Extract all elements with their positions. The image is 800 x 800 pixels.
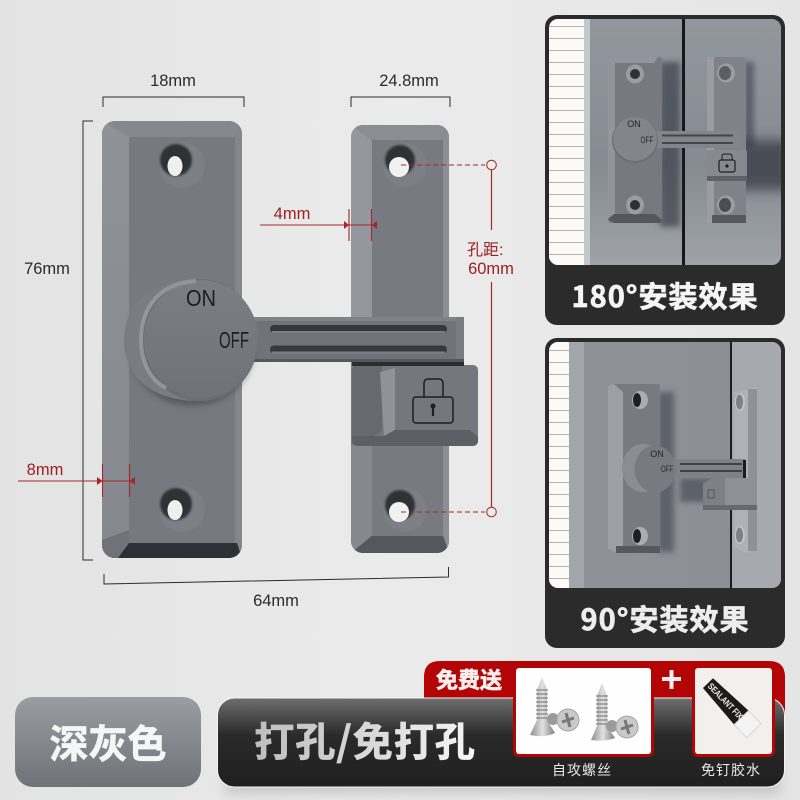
- dimension: 24.8mm width: [351, 72, 450, 107]
- screw 1: [530, 677, 579, 736]
- chip: colour name: [15, 697, 201, 787]
- label: ON: ON: [186, 285, 216, 311]
- icon: padlock: [413, 379, 453, 423]
- photo: door with latch 90: [549, 342, 781, 588]
- plate right: [734, 387, 757, 553]
- plate left: [608, 57, 662, 223]
- knob: OFF: [640, 135, 654, 145]
- chip: colour name: 深灰色: [49, 714, 167, 770]
- caption: 180: 180°安装效果: [571, 274, 759, 316]
- label: OFF: OFF: [219, 327, 249, 353]
- red callout: 8mm: 8mm: [27, 461, 63, 479]
- dimension: 24.8mm width: 24.8mm: [379, 72, 439, 90]
- red callout: hole spacing 60mm: 孔距:: [467, 241, 503, 259]
- free gift heading: 免费送: [436, 663, 502, 695]
- panel: 90 degree installation: [545, 338, 785, 648]
- caption: 90: 90°安装效果: [581, 597, 749, 639]
- right strike plate: [351, 125, 449, 553]
- dimension: 18mm width: 18mm: [150, 72, 196, 90]
- screw hole: left top: [159, 142, 205, 188]
- red callout: 4mm: [260, 205, 377, 241]
- left latch plate: [102, 121, 242, 558]
- lock block: [703, 478, 757, 510]
- red callout: 8mm: [18, 461, 135, 497]
- photo: door with latch 180: [549, 19, 792, 265]
- dimension: 64mm total width: 64mm: [253, 592, 299, 610]
- lock block: [352, 362, 478, 446]
- latch bar with grooves: [250, 317, 464, 362]
- bar: drill / no-drill: 打孔/免打孔: [254, 710, 476, 768]
- dimension: 76mm height: 76mm: [24, 260, 70, 278]
- red callout: hole spacing 60mm: [401, 160, 514, 517]
- dimension: 76mm height: [24, 121, 93, 560]
- bar: drill / no-drill: [218, 698, 784, 787]
- bar: [672, 459, 746, 478]
- plate left: [608, 384, 660, 553]
- screw hole: right top: [383, 143, 427, 187]
- knob: ON: [650, 449, 664, 459]
- gift: screws: [513, 665, 654, 757]
- free gift red backing: [424, 661, 785, 715]
- plate right: [707, 57, 746, 223]
- screw hole: left bottom: [159, 486, 205, 532]
- knob: ON: [627, 119, 641, 129]
- plus sign: [662, 670, 681, 689]
- red callout: 4mm: 4mm: [274, 205, 310, 223]
- bar shadow: [225, 770, 780, 794]
- lock block: [707, 150, 747, 181]
- knob: [612, 117, 658, 163]
- dimension: 64mm total width: [104, 567, 448, 610]
- bar: [655, 131, 740, 148]
- knob: [622, 444, 676, 492]
- caption: no-nail glue: 免钉胶水: [701, 760, 761, 780]
- screw hole: right bottom: [383, 488, 427, 532]
- caption: self-tapping screws: 自攻螺丝: [552, 760, 612, 780]
- glue tube: SEALANT FIX: [706, 681, 745, 721]
- panel: 180 degree installation: [545, 15, 792, 325]
- red callout: hole spacing 60mm: 60mm: [468, 260, 514, 278]
- dimension: 18mm width: [103, 72, 244, 107]
- gift: sealant glue: [692, 665, 775, 757]
- rotary knob with ON / OFF: [124, 279, 258, 406]
- knob: OFF: [661, 464, 673, 474]
- screw 2: [591, 683, 638, 741]
